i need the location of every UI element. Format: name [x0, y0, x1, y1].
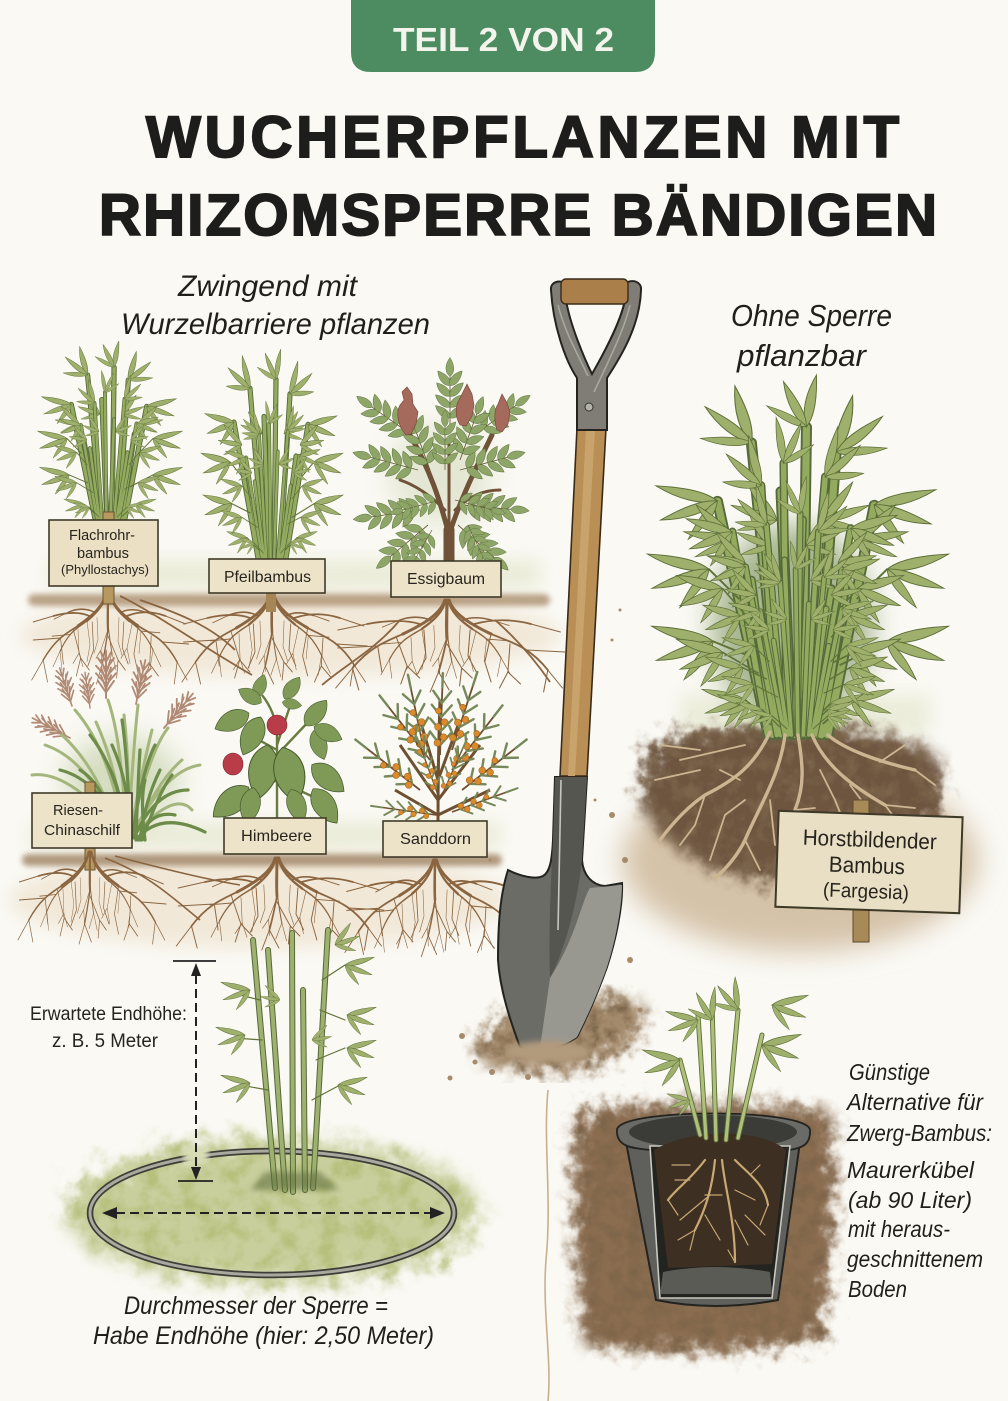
plant: Essigbaum	[322, 358, 565, 692]
tab: Teil 2 von 2	[351, 0, 655, 72]
label: Flachrohrbambus: (Phyllostachys)	[61, 563, 149, 577]
illustration: spade	[448, 279, 645, 1401]
heading: Zwingend mit Wurzelbarriere pflanzen: Zwingend mit	[177, 270, 359, 303]
illustration: Horstbildender Bambus without barrier	[622, 373, 978, 952]
label: Riesen-Chinaschilf: Chinaschilf	[44, 822, 121, 839]
tub floor	[660, 1267, 772, 1294]
title: WUCHERPFLANZEN MIT	[146, 105, 899, 170]
barrier ring	[90, 1151, 454, 1275]
blade	[498, 777, 622, 1050]
grass patch	[67, 1140, 477, 1284]
plant: Flachrohrbambus	[32, 340, 252, 684]
text: cheap alternative for dwarf bamboo: Maurerkübel	[847, 1157, 975, 1183]
label: Pfeilbambus	[209, 559, 325, 593]
title: RHIZOMSPERRE BÄNDIGEN	[99, 183, 937, 248]
heading: Ohne Sperre pflanzbar: pflanzbar	[736, 338, 868, 373]
annotation: expected height label: z. B. 5 Meter	[52, 1031, 159, 1052]
wooden shaft	[560, 428, 606, 776]
label: Sanddorn: Sanddorn	[400, 831, 471, 848]
soil	[574, 1104, 833, 1351]
text: cheap alternative for dwarf bamboo: Alternative für	[845, 1089, 984, 1115]
label: Horstbildender Bambus: Horstbildender	[802, 825, 937, 854]
label: Horstbildender Bambus	[775, 811, 963, 913]
label: Himbeere	[224, 818, 326, 854]
label: Himbeere: Himbeere	[241, 828, 312, 845]
label: Riesen-Chinaschilf	[32, 793, 132, 848]
tub outer	[626, 1142, 800, 1306]
crack	[545, 1090, 549, 1401]
label: Sanddorn	[383, 821, 487, 857]
arrow: height dimension	[173, 961, 216, 1181]
tab: Teil 2 von 2: TEIL 2 VON 2	[393, 21, 614, 58]
plant: Pfeilbambus	[182, 348, 367, 686]
label: Pfeilbambus: Pfeilbambus	[224, 569, 311, 586]
text: cheap alternative for dwarf bamboo: Günstige	[849, 1059, 930, 1085]
text: cheap alternative for dwarf bamboo: geschnittenem	[847, 1246, 983, 1272]
heading: Zwingend mit Wurzelbarriere pflanzen: Wurzelbarriere pflanzen	[121, 308, 430, 341]
illustration: bamboo inside rhizome barrier ring	[67, 921, 477, 1284]
label: Essigbaum: Essigbaum	[407, 571, 485, 588]
text: cheap alternative for dwarf bamboo: Zwerg-Bambus:	[846, 1120, 992, 1146]
label: Horstbildender Bambus: Bambus	[828, 852, 905, 879]
flower spikes	[398, 384, 510, 435]
wooden grip	[561, 279, 628, 304]
soil ball	[654, 1134, 786, 1268]
label: Essigbaum	[391, 561, 501, 597]
text: cheap alternative for dwarf bamboo: (ab 90 Liter)	[848, 1187, 972, 1213]
metal D-grip	[551, 281, 641, 430]
illustration: mason tub in soil	[574, 975, 833, 1351]
arrow: diameter dimension	[102, 1207, 445, 1219]
soil mound	[622, 768, 978, 952]
heading: Zwingend mit Wurzelbarriere pflanzen	[121, 270, 430, 341]
plant: Himbeere	[176, 672, 383, 950]
title	[99, 105, 937, 248]
tub rim	[617, 1114, 810, 1150]
text: cheap alternative for dwarf bamboo: mit heraus-	[848, 1216, 950, 1242]
label: Horstbildender Bambus: (Fargesia)	[823, 879, 909, 904]
plant: Riesen-Chinaschilf	[18, 650, 240, 944]
caption: diameter rule: Durchmesser der Sperre =	[124, 1292, 388, 1320]
roots	[655, 732, 935, 878]
label: Riesen-Chinaschilf: Riesen-	[53, 802, 103, 819]
label: Flachrohrbambus: Flachrohr-	[69, 528, 135, 544]
caption: diameter rule: Habe Endhöhe (hier: 2,50 Meter)	[93, 1322, 434, 1350]
cut-out interior	[650, 1146, 790, 1298]
label: Flachrohrbambus: bambus	[77, 546, 129, 562]
panel: soil bands	[10, 560, 560, 948]
caption: diameter rule	[93, 1292, 434, 1350]
small bamboo	[641, 975, 809, 1140]
dirt over blade tip	[506, 1041, 590, 1063]
dirt pile	[448, 608, 645, 1080]
tub roots	[668, 1160, 768, 1262]
annotation: expected height label: Erwartete Endhöhe:	[30, 1004, 187, 1025]
text: cheap alternative for dwarf bamboo	[845, 1059, 992, 1302]
bamboo	[215, 921, 377, 1192]
label: Flachrohrbambus	[49, 520, 158, 586]
heading: Ohne Sperre pflanzbar	[731, 298, 892, 373]
heading: Ohne Sperre pflanzbar: Ohne Sperre	[731, 298, 892, 333]
annotation: expected height label	[30, 1004, 187, 1052]
text: cheap alternative for dwarf bamboo: Boden	[848, 1276, 907, 1302]
plant: Sanddorn	[345, 669, 533, 957]
